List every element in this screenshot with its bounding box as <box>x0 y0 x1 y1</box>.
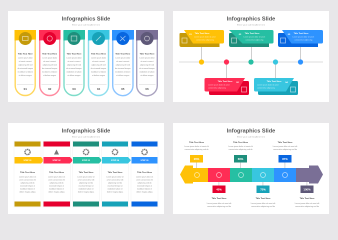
step 01 <box>14 141 44 207</box>
column 02: sit amet consect <box>43 60 57 63</box>
card 02: consectetur adipiscing <box>208 86 226 90</box>
panel: arrow percent slide <box>173 123 329 214</box>
card 05: 05 <box>288 34 291 36</box>
card 02: Title Text Here <box>218 80 233 83</box>
column 04: et dolore magna <box>92 74 105 77</box>
card 05 <box>278 30 323 65</box>
step 01: amet consectetur elit <box>19 178 36 182</box>
step 04: dolore magna aliqua <box>107 192 123 194</box>
column 04: Title Text Here <box>91 52 107 56</box>
step 05: Lorem ipsum dolor sit <box>136 176 154 178</box>
column 01: et dolore magna <box>19 74 32 77</box>
step 02: adipiscing sed do <box>50 182 63 184</box>
card 04: consectetur adipiscing <box>257 86 275 90</box>
card 03: Title Text Here <box>245 32 260 35</box>
column 01: Title Text Here <box>18 52 34 56</box>
column 06 <box>136 30 158 96</box>
callout 87%: Lorem ipsum dolor sit amet elit <box>273 145 298 148</box>
card 03: consectetur adipiscing <box>246 38 263 42</box>
callout 60%: consectetur adipiscing sed do <box>229 148 252 151</box>
step 04: amet consectetur elit <box>107 178 124 182</box>
callout 60%: 60% <box>238 157 244 161</box>
callout 100%: Title Text Here <box>300 197 315 200</box>
column 05: Lorem ipsum dolor <box>115 58 131 60</box>
panel: six column slide <box>8 11 164 102</box>
column 02: et dolore magna <box>43 74 56 77</box>
step 04: incididunt labore et <box>107 188 123 190</box>
card 05: Title Text Here <box>294 32 309 35</box>
column 06: sit amet consect <box>141 60 154 63</box>
card 03: Lorem ipsum dolor sit amet <box>244 36 266 38</box>
column 05: do eiusmod tempor <box>115 67 131 70</box>
callout 60%: Lorem ipsum dolor sit amet elit <box>228 145 253 148</box>
step 02 <box>43 141 73 207</box>
callout 87%: consectetur adipiscing sed do <box>273 148 297 151</box>
callout 40% <box>207 182 232 208</box>
column 03: 03 <box>72 87 76 91</box>
column 05 <box>112 30 134 96</box>
card 01: consectetur adipiscing <box>196 38 214 42</box>
step 05: eiusmod tempor ut <box>137 184 152 188</box>
column 06: 06 <box>145 87 149 91</box>
column 01: incididunt ut labore <box>18 70 33 74</box>
step 05: amet consectetur elit <box>136 178 153 182</box>
step 03: adipiscing sed do <box>79 182 93 184</box>
step 04: Lorem ipsum dolor sit <box>106 176 124 178</box>
card 01: Title Text Here <box>195 32 210 35</box>
step 03: eiusmod tempor ut <box>79 184 94 188</box>
column 02: Lorem ipsum dolor <box>42 58 58 60</box>
callout 20%: Lorem ipsum dolor sit amet elit <box>184 145 209 148</box>
callout 87%: 87% <box>282 157 288 161</box>
step 01: Title Text Here <box>20 171 36 174</box>
column 06: incididunt ut labore <box>139 70 155 74</box>
column 04 <box>88 30 110 96</box>
column 02 <box>39 30 60 96</box>
column 06: do eiusmod tempor <box>139 67 155 70</box>
step 03: incididunt labore et <box>78 188 94 190</box>
step 05: dolore magna aliqua <box>136 192 153 194</box>
card 02: 02 <box>236 82 239 84</box>
callout 20%: Title Text Here <box>189 141 205 144</box>
step 03: Title Text Here <box>79 171 94 174</box>
callout 40%: 40% <box>216 188 222 192</box>
subtitle: Enter your sub headline here <box>72 24 101 26</box>
callout 60%: Title Text Here <box>233 141 249 144</box>
step 01: adipiscing sed do <box>21 182 34 184</box>
step 05: Title Text Here <box>137 171 153 174</box>
callout 20%: 20% <box>194 157 200 161</box>
column 05: adipiscing elit sed <box>116 64 130 66</box>
card 02 <box>204 59 249 95</box>
column 05: et dolore magna <box>116 74 129 77</box>
column 01: sit amet consect <box>19 60 32 63</box>
card 01: 01 <box>189 34 192 36</box>
subtitle: Enter your sub headline here <box>237 136 266 138</box>
column 06: et dolore magna <box>140 74 154 77</box>
column 06: adipiscing elit sed <box>140 64 154 66</box>
card 03: 03 <box>239 34 242 36</box>
callout 100%: Lorem ipsum dolor sit amet elit <box>295 202 320 205</box>
column 06: Lorem ipsum dolor <box>140 58 155 60</box>
panel: timeline slide <box>173 11 329 102</box>
column 05: incididunt ut labore <box>115 70 130 74</box>
step 03: Lorem ipsum dolor sit <box>77 176 95 178</box>
column 04: Lorem ipsum dolor <box>91 58 106 60</box>
column 03: incididunt ut labore <box>66 70 82 74</box>
column 04: 04 <box>97 87 100 91</box>
column 02: do eiusmod tempor <box>42 67 58 70</box>
panel: steps slide <box>8 123 164 214</box>
callout 40%: Title Text Here <box>212 197 227 200</box>
column 02: incididunt ut labore <box>42 70 57 74</box>
step 04: STEP 04 <box>111 159 120 162</box>
callout 75%: consectetur adipiscing sed do <box>251 205 275 208</box>
step 03: STEP 03 <box>82 160 91 162</box>
step 03: dolore magna aliqua <box>78 192 94 194</box>
column 03 <box>64 30 85 96</box>
column 04: sit amet consect <box>92 60 105 63</box>
step 03 <box>72 141 102 207</box>
card 01 <box>180 30 224 65</box>
column 03: sit amet consect <box>68 60 81 63</box>
column 04: do eiusmod tempor <box>91 67 107 70</box>
column 03: Lorem ipsum dolor <box>67 58 82 60</box>
step 02: Lorem ipsum dolor sit <box>48 176 66 178</box>
title: Infographics Slide <box>62 128 110 134</box>
callout 87% <box>273 141 298 168</box>
column 02: Title Text Here <box>42 52 58 56</box>
card 01: Lorem ipsum dolor sit amet <box>194 36 216 38</box>
card 05: consectetur adipiscing <box>294 38 312 42</box>
step 04: Title Text Here <box>108 171 123 174</box>
callout 75%: 75% <box>260 188 266 192</box>
callout 87%: Title Text Here <box>278 141 293 144</box>
step 02: incididunt labore et <box>49 188 65 190</box>
column 05: 05 <box>121 87 125 91</box>
column 01: 01 <box>24 87 27 91</box>
step 02: Title Text Here <box>49 171 65 174</box>
step 02: amet consectetur elit <box>48 178 65 182</box>
step 04 <box>102 141 131 207</box>
callout 20% <box>184 141 209 168</box>
card 04: Lorem ipsum dolor sit amet <box>257 84 279 86</box>
callout 100% <box>295 182 320 208</box>
step 01: dolore magna aliqua <box>19 192 36 194</box>
step 01: STEP 01 <box>24 160 32 162</box>
column 01: do eiusmod tempor <box>18 67 33 70</box>
column 03: et dolore magna <box>68 74 80 77</box>
card 03 <box>229 30 274 65</box>
step 01: incididunt labore et <box>20 188 36 190</box>
column 01: Lorem ipsum dolor <box>18 58 33 60</box>
column 03: Title Text Here <box>67 52 82 56</box>
subtitle: Enter your sub headline here <box>72 136 101 138</box>
timeline axis <box>179 61 323 63</box>
title: Infographics Slide <box>227 128 275 134</box>
step 05: incididunt labore et <box>137 188 153 190</box>
column 05: sit amet consect <box>116 60 130 63</box>
callout 100%: consectetur adipiscing sed do <box>295 205 319 208</box>
callout 20%: consectetur adipiscing sed do <box>185 148 208 151</box>
card 05: Lorem ipsum dolor sit amet <box>292 36 315 38</box>
callout 40%: consectetur adipiscing sed do <box>207 205 231 208</box>
card 02: Lorem ipsum dolor sit amet <box>208 84 230 86</box>
title: Infographics Slide <box>227 16 275 22</box>
title: Infographics Slide <box>62 16 110 22</box>
column 04: incididunt ut labore <box>91 70 106 74</box>
callout 75%: Lorem ipsum dolor sit amet elit <box>251 202 276 205</box>
step 01: Lorem ipsum dolor sit <box>19 176 37 178</box>
card 04 <box>254 59 298 95</box>
subtitle: Enter your sub headline here <box>237 24 266 26</box>
step 02: STEP 02 <box>53 160 61 162</box>
column 04: adipiscing elit sed <box>91 64 106 66</box>
step 05 <box>131 141 158 207</box>
column 01: adipiscing elit sed <box>18 64 32 66</box>
step 04: eiusmod tempor ut <box>108 184 123 188</box>
step 04: adipiscing sed do <box>108 182 122 184</box>
step 05: STEP 05 <box>141 160 149 162</box>
card 04: 04 <box>285 81 288 84</box>
arrow band <box>180 166 323 184</box>
callout 100%: 100% <box>303 188 311 192</box>
column 06: Title Text Here <box>140 52 155 56</box>
column 02: 02 <box>48 87 52 91</box>
step 01: eiusmod tempor ut <box>20 184 35 188</box>
step 03: amet consectetur elit <box>78 178 95 182</box>
callout 75% <box>251 182 276 208</box>
column 03: adipiscing elit sed <box>67 64 81 66</box>
step 05: adipiscing sed do <box>138 182 151 184</box>
column 05: Title Text Here <box>115 52 131 56</box>
callout 40%: Lorem ipsum dolor sit amet elit <box>207 202 232 205</box>
column 03: do eiusmod tempor <box>66 67 82 70</box>
column 02: adipiscing elit sed <box>43 64 57 66</box>
callout 75%: Title Text Here <box>256 197 271 200</box>
callout 60% <box>228 141 253 168</box>
step 02: eiusmod tempor ut <box>49 184 64 188</box>
step 02: dolore magna aliqua <box>48 192 65 194</box>
card 04: Title Text Here <box>267 80 282 83</box>
column 01 <box>14 30 36 96</box>
